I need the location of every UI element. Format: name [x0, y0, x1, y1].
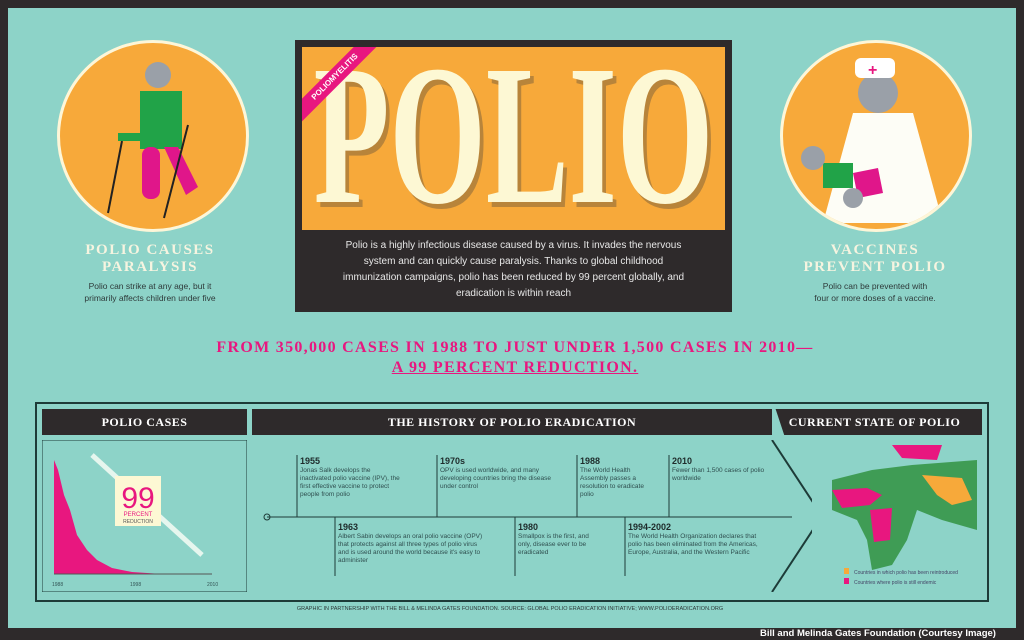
panel: title — [295, 40, 732, 312]
event 1980 — [518, 522, 589, 556]
event 1994-2002: 1994-2002 — [628, 522, 671, 532]
event 1955: 1955 — [300, 456, 320, 466]
heading: polio causes paralysis — [85, 242, 215, 275]
chart: polio cases — [42, 440, 247, 592]
heading: polio causes paralysis: PARALYSIS — [102, 259, 198, 275]
event 1988: The World Health Assembly passes a resolution to eradicate polio — [580, 467, 644, 498]
title box — [302, 47, 725, 230]
event 1970s: 1970s — [440, 456, 465, 466]
text: paralysis: Polio can strike at any age, but it — [89, 281, 211, 291]
chart: polio cases: REDUCTION — [123, 519, 153, 525]
event 1994-2002: The World Health Organization declares that polio has been eliminated from the Americas, Europe, Australia, and the Western Pacific — [628, 533, 758, 556]
chart: polio cases: PERCENT — [124, 512, 153, 518]
icon: paralysis circle — [57, 40, 249, 232]
event 1955: Jonas Salk develops the inactivated polio vaccine (IPV), the first effective vaccine to protect people from polio — [300, 467, 400, 498]
header: current state: CURRENT STATE OF POLIO — [789, 415, 960, 429]
text: vaccines: Polio can be prevented with — [823, 281, 927, 291]
header: polio cases — [42, 409, 247, 435]
event 1970s — [440, 456, 551, 490]
headline: FROM 350,000 CASES IN 1988 TO JUST UNDER 1,500 CASES IN 2010— — [216, 339, 814, 356]
icon: vaccine circle — [780, 40, 972, 232]
heading: vaccines prevent polio — [804, 242, 946, 275]
intro text: Polio is a highly infectious disease caused by a virus. It invades the nervous system and can quickly cause paralysis. Thanks to global childhood immunization campaigns, polio has been reduced by 99 percent globally, and eradication is within reach — [343, 240, 684, 299]
headline — [216, 339, 814, 376]
heading: polio causes paralysis: POLIO CAUSES — [85, 242, 215, 258]
panel: bottom table — [35, 402, 989, 602]
headline: A 99 PERCENT REDUCTION. — [392, 359, 638, 376]
chart: polio cases: 99 — [121, 482, 155, 515]
text: paralysis: primarily affects children under five — [84, 293, 216, 303]
chart: polio cases: 2010 — [207, 582, 218, 588]
event 2010 — [672, 456, 764, 482]
map: Countries where polio is still endemic — [854, 580, 937, 586]
event 2010: 2010 — [672, 456, 692, 466]
chart: polio cases: 1998 — [130, 582, 141, 588]
header: polio cases: POLIO CASES — [102, 415, 187, 429]
timeline — [264, 440, 812, 592]
ribbon: POLIOMYELITIS — [310, 52, 360, 102]
heading: vaccines prevent polio: VACCINES — [831, 242, 919, 258]
event 1994-2002 — [628, 522, 758, 556]
heading: vaccines prevent polio: PREVENT POLIO — [804, 259, 946, 275]
ribbon — [290, 32, 380, 122]
event 1963: 1963 — [338, 522, 358, 532]
text: vaccines: four or more doses of a vaccine. — [814, 293, 936, 303]
credit: Bill and Melinda Gates Foundation (Courtesy Image) — [760, 628, 996, 639]
text: paralysis — [84, 281, 216, 303]
header: current state — [767, 409, 982, 435]
header: history — [252, 409, 772, 435]
map: Countries in which polio has been reintroduced — [854, 570, 958, 576]
event 1980: 1980 — [518, 522, 538, 532]
header: history: THE HISTORY OF POLIO ERADICATION — [388, 415, 636, 429]
text: vaccines — [814, 281, 936, 303]
event 1980: Smallpox is the first, and only, disease ever to be eradicated — [518, 533, 589, 556]
event 1963: Albert Sabin develops an oral polio vaccine (OPV) that protects against all three types of polio virus and is used around the world because it's easy to administer — [338, 533, 482, 564]
source line: GRAPHIC IN PARTNERSHIP WITH THE BILL & MELINDA GATES FOUNDATION. SOURCE: GLOBAL POLIO ERADICATION INITIATIVE; WWW.POLIOERADICATION.ORG — [297, 606, 723, 612]
chart: polio cases: 1988 — [52, 582, 63, 588]
icon: vaccine circle: + — [868, 62, 877, 79]
event 1988: 1988 — [580, 456, 600, 466]
event 2010: Fewer than 1,500 cases of polio worldwide — [672, 467, 764, 482]
map — [832, 445, 977, 586]
event 1970s: OPV is used worldwide, and many developing countries bring the disease under control — [440, 467, 551, 490]
